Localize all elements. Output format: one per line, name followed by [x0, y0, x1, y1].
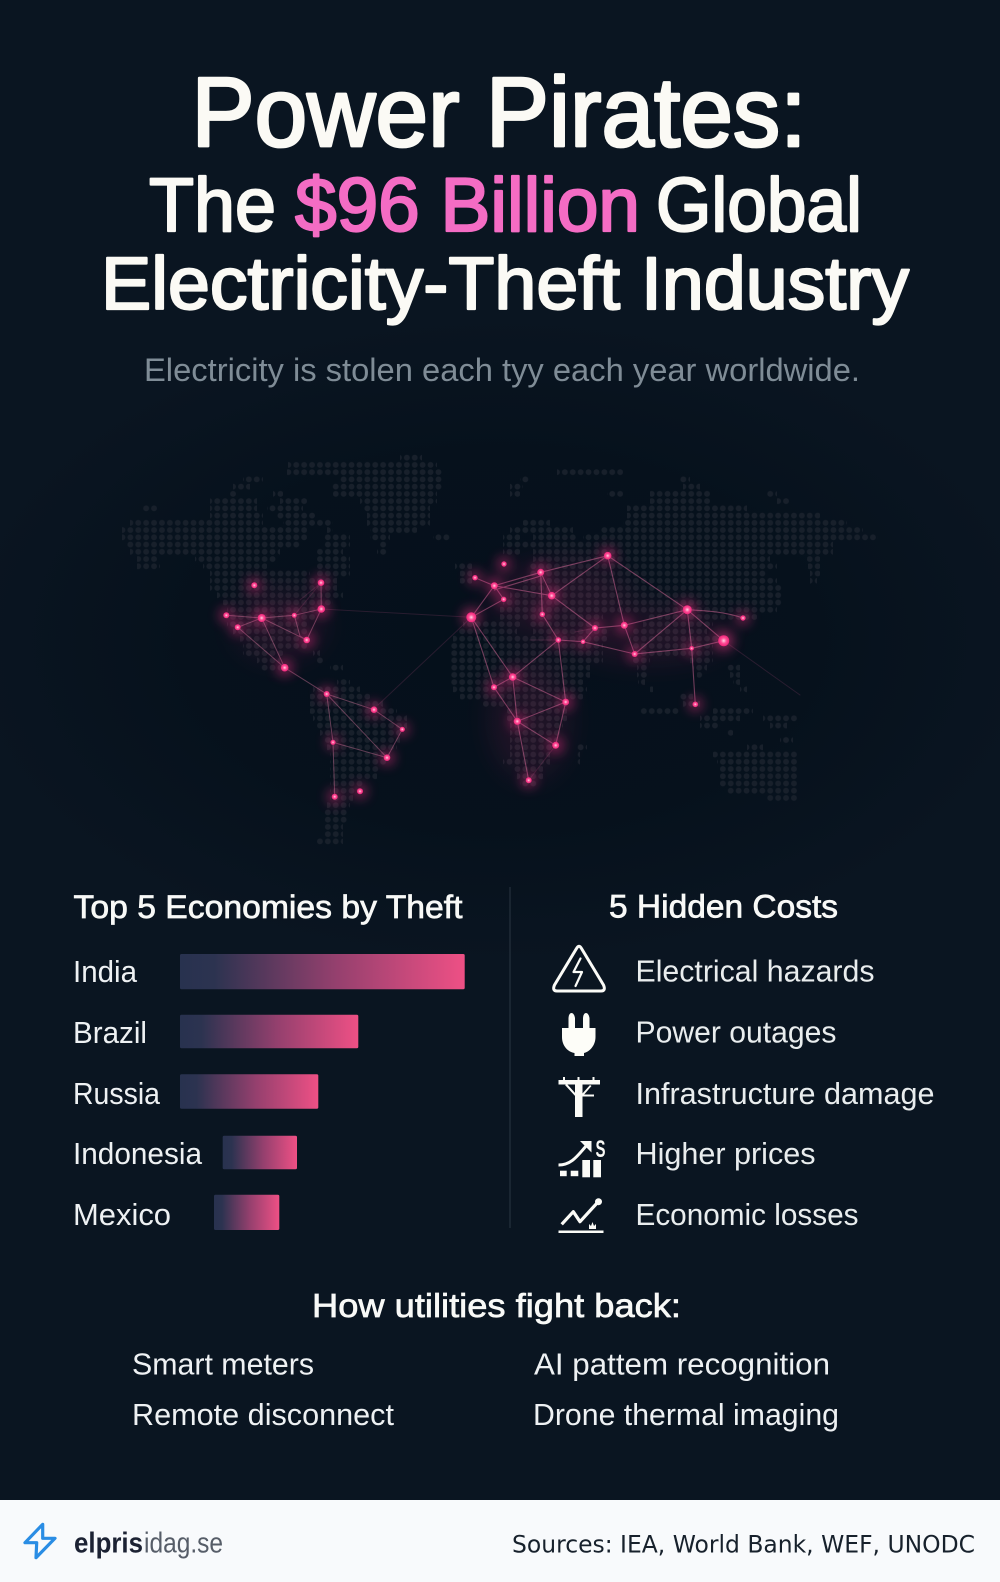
title: Electricity-Theft Industry	[101, 242, 909, 325]
label: electrical hazards: Electrical hazards	[636, 954, 874, 988]
list: countermeasures: Remote disconnect	[132, 1397, 394, 1432]
logo wordmark	[74, 1527, 223, 1559]
subtitle: Electricity is stolen each tyy each year worldwide.	[144, 352, 860, 388]
icon: rising prices	[558, 1136, 606, 1177]
heading: hidden costs: 5 Hidden Costs	[609, 888, 838, 924]
icon: utility pole	[558, 1077, 600, 1117]
title: The	[149, 163, 276, 248]
title: Power Pirates:	[192, 57, 806, 167]
footer	[0, 1500, 1000, 1582]
row: Indonesia: Indonesia	[73, 1136, 203, 1171]
world map network	[122, 454, 878, 845]
row: Russia	[73, 1074, 318, 1111]
label: infrastructure damage: Infrastructure damage	[636, 1076, 934, 1111]
row: India	[73, 954, 465, 989]
dotted world map	[122, 454, 878, 845]
sources: Sources: IEA, World Bank, WEF, UNODC	[512, 1531, 975, 1559]
icon: economic losses	[558, 1198, 604, 1233]
list: countermeasures: Smart meters	[132, 1346, 314, 1381]
label: higher prices: Higher prices	[636, 1136, 816, 1171]
row: Brazil: Brazil	[73, 1015, 147, 1050]
connection lines	[226, 556, 800, 797]
title: $96 Billion	[295, 163, 640, 248]
row: Indonesia	[73, 1136, 297, 1171]
icon: plug	[562, 1013, 596, 1056]
logo wordmark: idag.se	[144, 1527, 223, 1559]
electricity theft nodes	[223, 552, 746, 800]
heading: top 5 economies: Top 5 Economies by Theft	[74, 889, 463, 925]
icon: electrical hazard triangle	[554, 946, 604, 991]
label: power outages: Power outages	[636, 1014, 836, 1050]
row: Russia: Russia	[73, 1076, 161, 1111]
node glow	[223, 552, 746, 800]
row: India: India	[73, 954, 138, 989]
row: Mexico: Mexico	[73, 1197, 171, 1232]
icon: logo lightning bolt	[25, 1524, 55, 1558]
logo wordmark: elpris	[74, 1527, 143, 1559]
list: countermeasures: AI pattem recognition	[534, 1346, 830, 1381]
panel: hidden costs	[554, 888, 934, 1233]
row: Brazil	[73, 1015, 358, 1050]
panel: top 5 economies	[73, 889, 465, 1232]
label: economic losses: Economic losses	[636, 1197, 858, 1232]
title: Global	[656, 163, 862, 248]
title	[101, 57, 909, 325]
list: countermeasures: Drone thermal imaging	[533, 1397, 839, 1432]
panel: how utilities fight back	[132, 1287, 839, 1432]
list: countermeasures	[132, 1346, 839, 1432]
icon: rising prices: S	[596, 1136, 606, 1163]
heading: how utilities fight back: How utilities fight back:	[312, 1287, 681, 1324]
row: Mexico	[73, 1195, 279, 1232]
regional glow	[235, 560, 730, 780]
